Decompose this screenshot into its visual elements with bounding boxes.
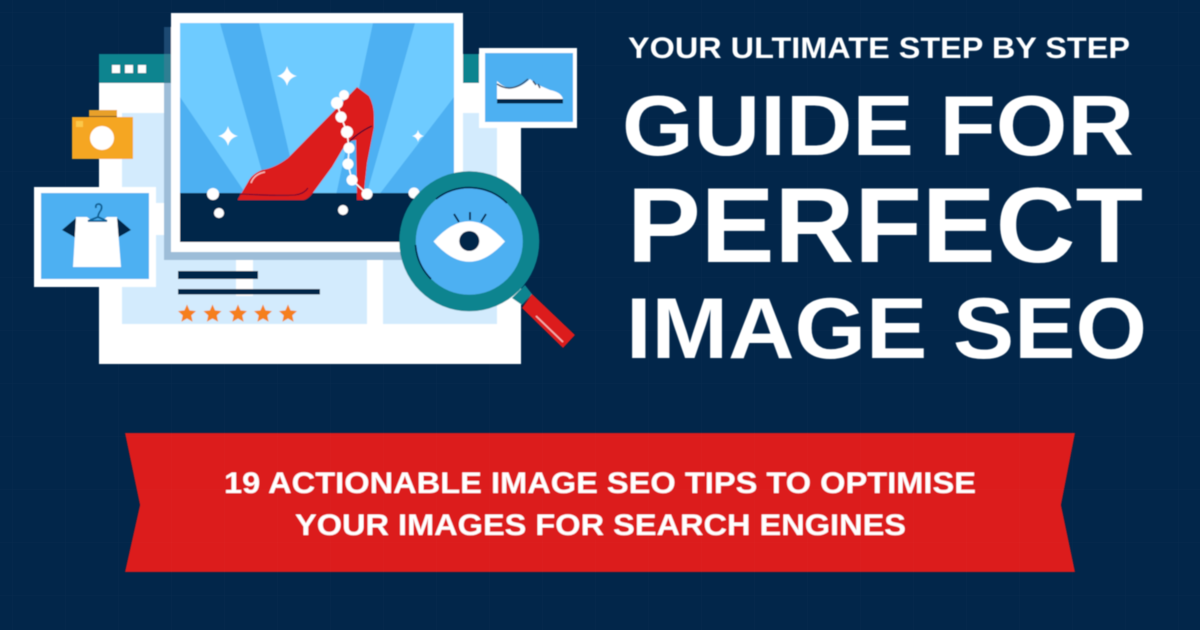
illustration: image search scene [34, 13, 577, 364]
sparkles [277, 66, 297, 86]
five orange stars [178, 304, 297, 322]
icon: eye [434, 212, 505, 262]
ribbon banner [125, 433, 1075, 572]
icon: camera [72, 110, 133, 159]
pearl necklace [207, 90, 420, 218]
title line 3: IMAGE SEO [626, 281, 1147, 377]
banner text line 1: 19 ACTIONABLE IMAGE SEO TIPS TO OPTIMISE [224, 467, 976, 500]
banner text line 2: YOUR IMAGES FOR SEARCH ENGINES [295, 509, 906, 542]
headline block [622, 32, 1147, 377]
magnifying glass with eye [399, 171, 575, 348]
product description lines [178, 271, 320, 294]
title line 2: PERFECT [627, 165, 1143, 285]
card: t-shirt on hanger [34, 187, 156, 287]
card: sneaker [479, 48, 577, 128]
subheading: YOUR ULTIMATE STEP BY STEP [628, 32, 1130, 65]
red high-heel shoe [238, 87, 374, 200]
title line 1: GUIDE FOR [622, 79, 1134, 174]
browser window [99, 54, 521, 364]
photo frame with shadow [164, 13, 474, 260]
